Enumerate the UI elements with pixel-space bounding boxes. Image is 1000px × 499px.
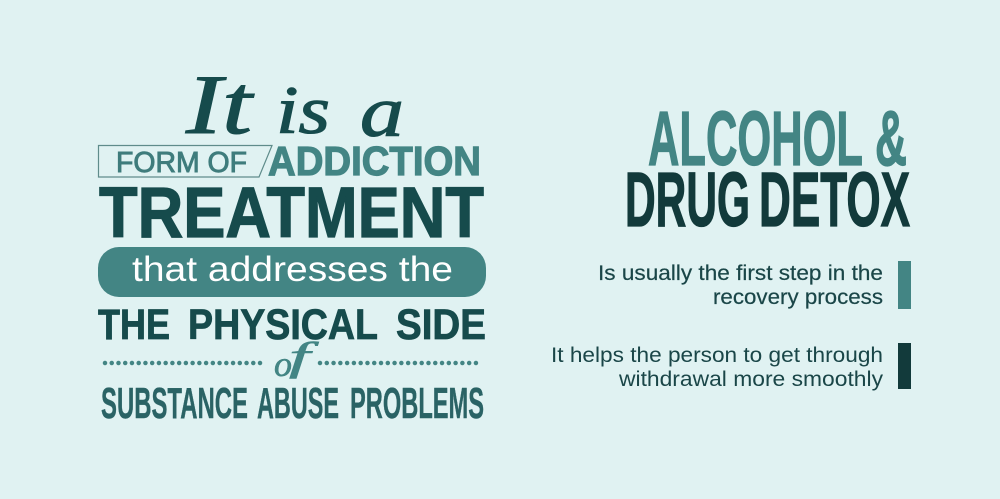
- heading word: ADDICTION: ADDICTION: [268, 138, 481, 184]
- text block: first step: recovery process: [713, 286, 883, 309]
- heading line: THE PHYSICAL SIDE: PHYSICAL: [188, 301, 378, 349]
- heading line: SUBSTANCE ABUSE PROBLEMS: [101, 380, 484, 428]
- heading line: SUBSTANCE ABUSE PROBLEMS: PROBLEMS: [350, 380, 484, 428]
- text block: withdrawal: withdrawal more smoothly: [618, 368, 884, 391]
- script heading: It is a: is: [276, 72, 330, 148]
- dotted divider with script word: of: o: [274, 344, 292, 384]
- dotted divider with script word: of: f: [289, 334, 319, 379]
- pill banner: that addresses the: [98, 247, 486, 297]
- script heading: It is a: a: [360, 72, 404, 152]
- heading line: THE PHYSICAL SIDE: THE: [98, 301, 170, 349]
- heading line: THE PHYSICAL SIDE: [98, 301, 486, 349]
- heading line: SUBSTANCE ABUSE PROBLEMS: ABUSE: [257, 380, 339, 428]
- title line: DRUG DETOX: DRUG: [625, 157, 750, 243]
- script heading: It is a: [185, 58, 404, 152]
- title line: ALCOHOL &: &: [875, 94, 907, 182]
- heading line: THE PHYSICAL SIDE: SIDE: [396, 301, 486, 349]
- text block: first step: Is usually the first step in the: [598, 262, 883, 285]
- dotted divider with script word: of: [105, 334, 477, 384]
- pill banner: that addresses the: that addresses the: [132, 250, 453, 289]
- heading line: SUBSTANCE ABUSE PROBLEMS: SUBSTANCE: [101, 380, 248, 428]
- text block: withdrawal: It helps the person to get through: [551, 344, 883, 367]
- text block: withdrawal: [551, 344, 884, 391]
- heading word: TREATMENT: TREATMENT: [99, 174, 484, 253]
- text block: first step: [598, 262, 883, 309]
- accent bar: teal: [898, 261, 911, 309]
- outlined label: FORM OF: FORM OF: [116, 147, 247, 179]
- script heading: It is a: It: [185, 58, 255, 152]
- accent bar: dark: [898, 343, 911, 389]
